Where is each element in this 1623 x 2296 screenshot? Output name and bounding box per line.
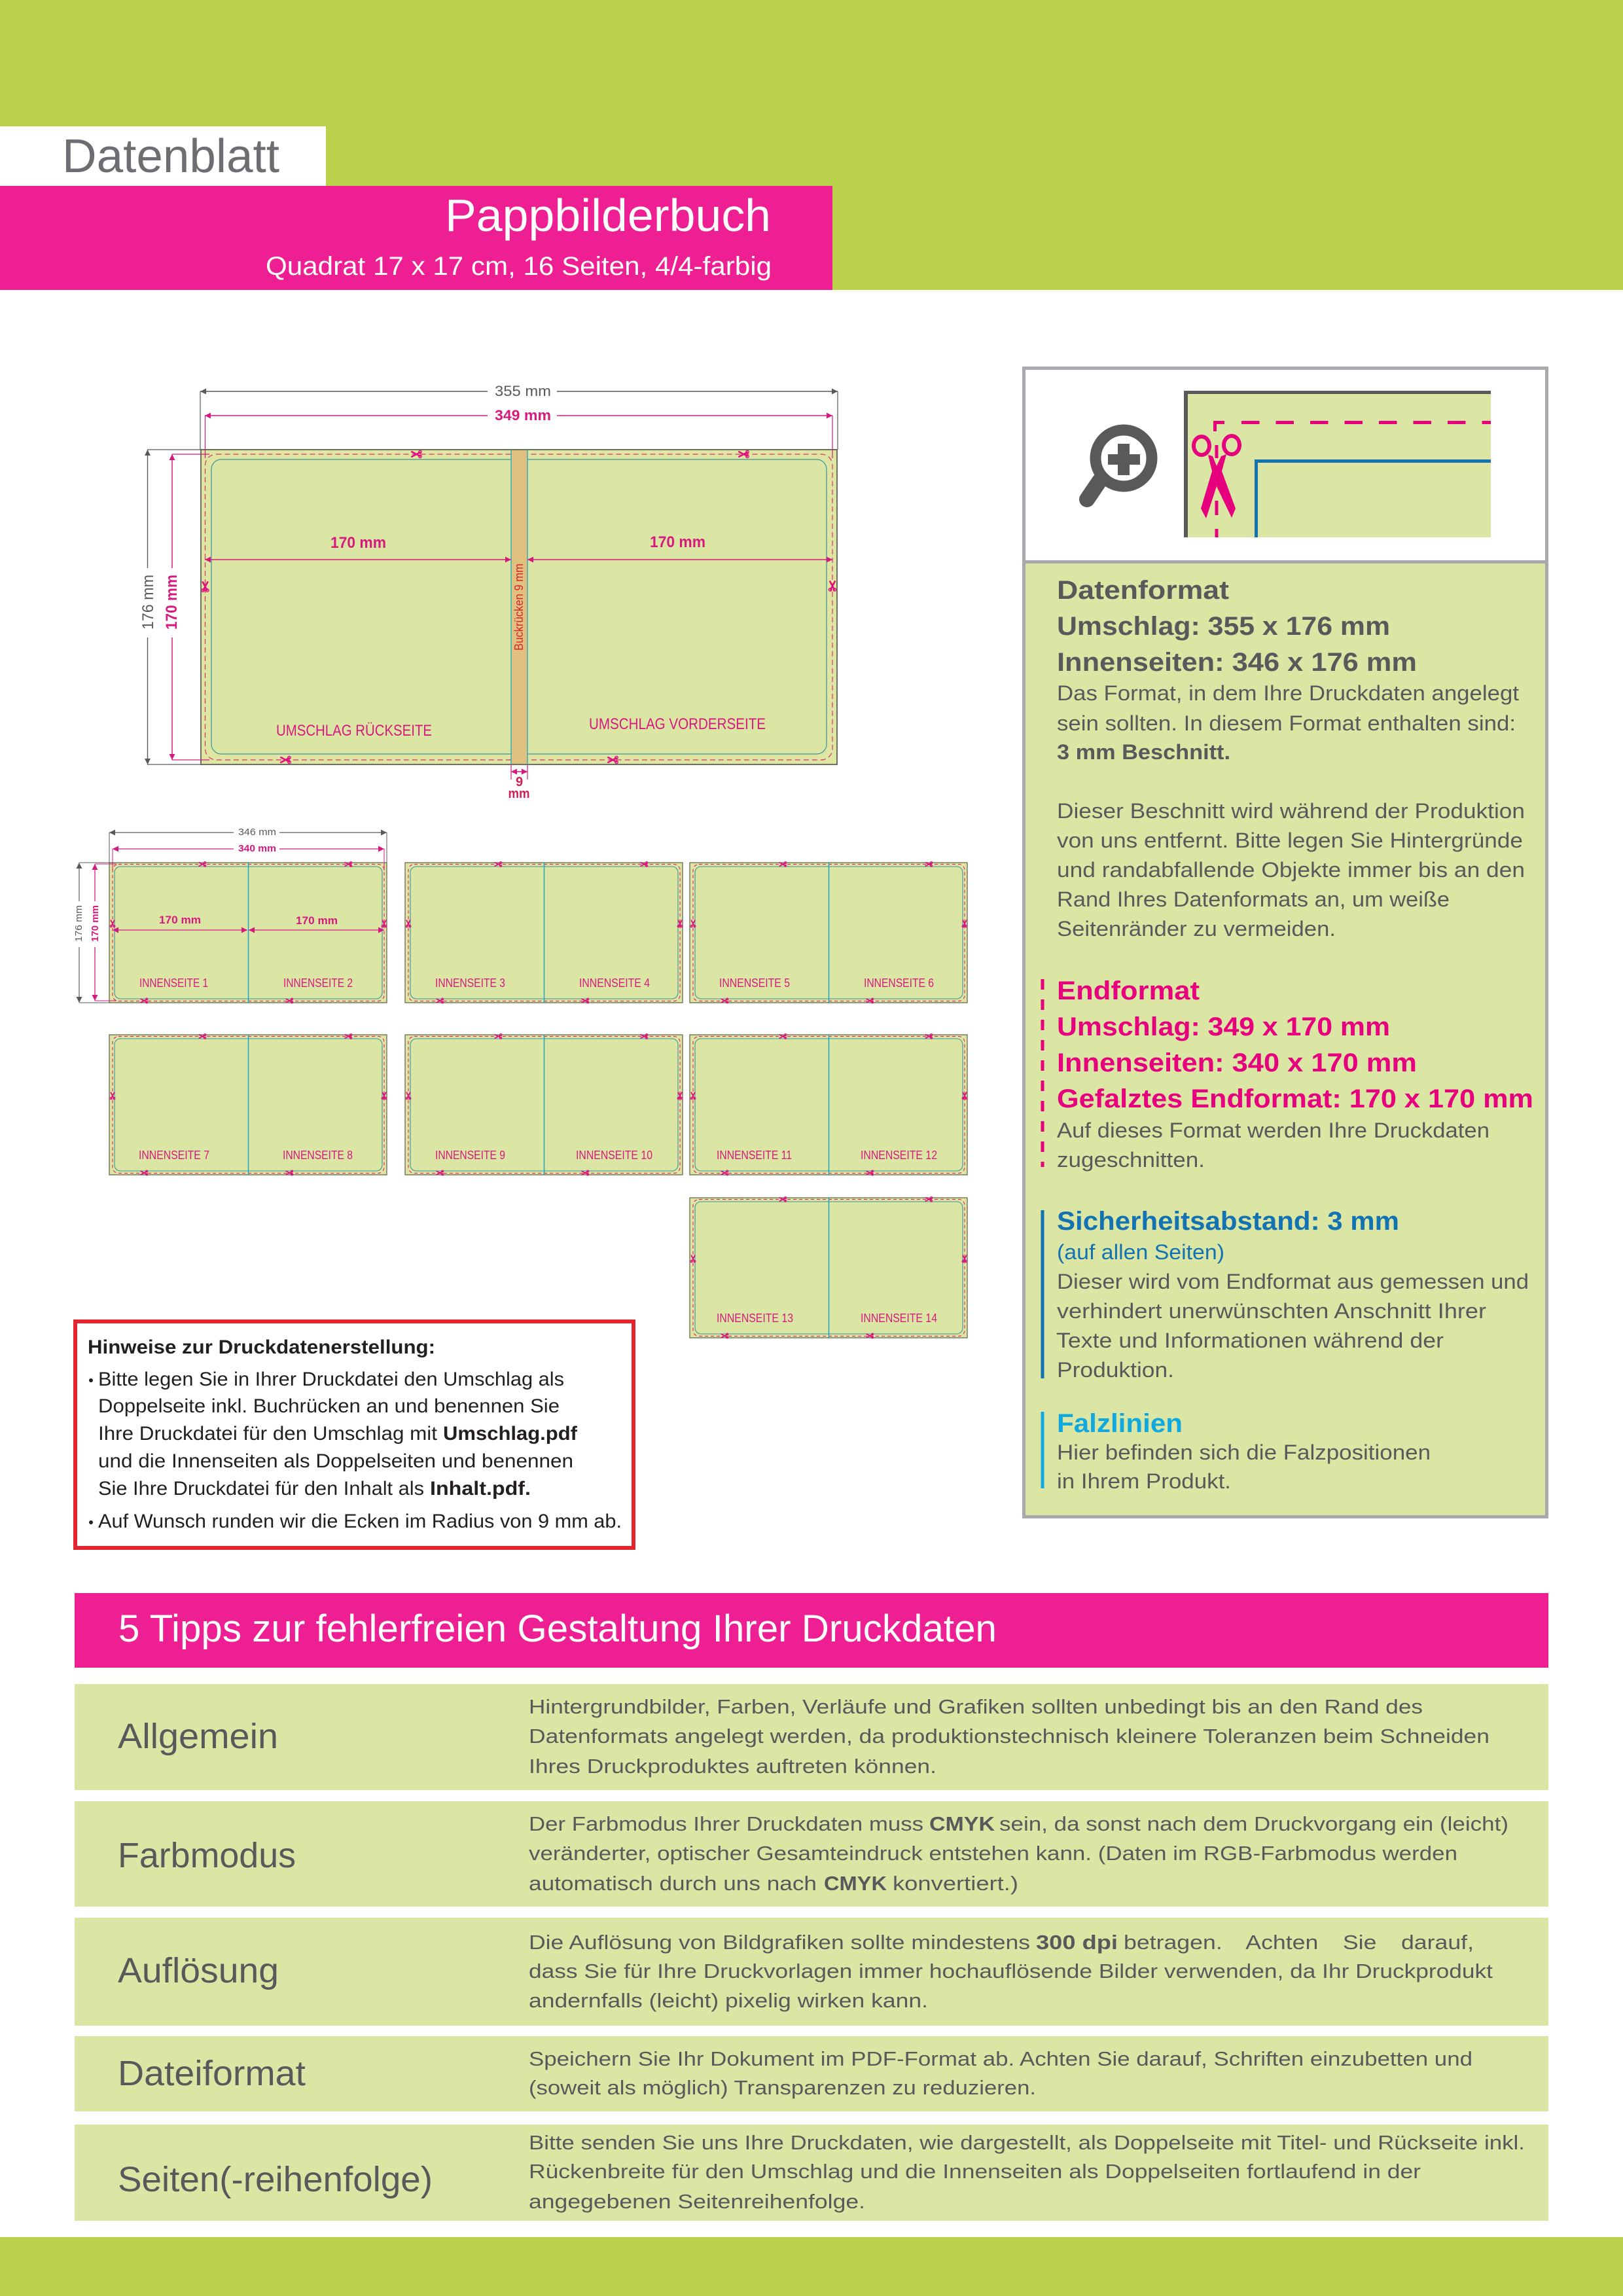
spine: Buckrücken 9 mm: [512, 564, 526, 651]
heading: 5 Tipps: [75, 1593, 1548, 1668]
text block: Sicherheitsabstand: (auf allen Seiten): [1057, 1240, 1224, 1264]
tip: Seiten(-reihenfolge): [75, 2125, 1548, 2221]
tip: Allgemein: Allgemein: [118, 1717, 278, 1756]
panel: Innenseite 13/14: INNENSEITE 14: [861, 1312, 937, 1325]
dimension 9 mm spine: 9: [516, 775, 523, 789]
text block: Endformat: zugeschnitten.: [1057, 1148, 1205, 1172]
bottom green band: [0, 2237, 1623, 2296]
text block: Endformat: Auf dieses Format werden Ihre Druckdaten: [1057, 1119, 1489, 1142]
panel: Innenseite 13/14: INNENSEITE 13: [717, 1312, 793, 1325]
panel: Innenseite 3/4: INNENSEITE 3: [435, 977, 505, 990]
dimension 170 mm small: 170 mm: [90, 905, 101, 942]
callout: Hinweise zur Druckdatenerstellung: Hinweise zur Druckdatenerstellung:: [88, 1336, 435, 1358]
callout: Hinweise zur Druckdatenerstellung: Ihre Druckdatei für den Umschlag mit: [98, 1423, 438, 1444]
callout: Hinweise zur Druckdatenerstellung: Sie Ihre Druckdatei für den Inhalt als: [98, 1478, 424, 1499]
label: Umschlag Vorderseite: UMSCHLAG VORDERSEITE: [589, 715, 766, 733]
top green banner: [0, 0, 1623, 290]
tip: Auflösung: andernfalls (leicht) pixelig wirken kann.: [529, 1989, 928, 2012]
text block: Datenformat: Das Format, in dem Ihre Druckdaten angelegt: [1057, 681, 1519, 705]
tip: Auflösung: betragen. Achten Sie darauf,: [1124, 1931, 1474, 1954]
panel: Innenseite 1/2: INNENSEITE 2: [283, 977, 353, 990]
callout: Hinweise zur Druckdatenerstellung: Inhalt.pdf.: [430, 1478, 531, 1499]
text block: Datenformat: Dieser Beschnitt wird während der Produktion: [1057, 799, 1525, 823]
text block: Sicherheitsabstand: Texte und Informationen während der: [1056, 1329, 1444, 1352]
panel: Innenseite 7/8: INNENSEITE 7: [139, 1149, 209, 1162]
callout: Hinweise zur Druckdatenerstellung: Bitte legen Sie in Ihrer Druckdatei den Umschlag als: [98, 1369, 564, 1390]
dimension 340 mm: 340 mm: [238, 843, 276, 854]
text block: Endformat: [1043, 977, 1533, 1172]
panel: Innenseite 9/10: INNENSEITE 10: [576, 1149, 652, 1162]
dimension 176 mm small: 176 mm: [73, 905, 84, 942]
callout: Hinweise zur Druckdatenerstellung: Umschlag.pdf: [443, 1423, 578, 1444]
dimension 9 mm spine: mm: [508, 787, 530, 801]
panel: Innenseite 11/12: INNENSEITE 11: [717, 1149, 792, 1162]
callout: Hinweise zur Druckdatenerstellung: Auf Wunsch runden wir die Ecken im Radius von 9 mm ab.: [98, 1511, 622, 1532]
tip: Allgemein: Datenformats angelegt werden, da produktionstechnisch kleinere Toleranzen beim Schneiden: [529, 1725, 1489, 1748]
panel: Innenseite 1/2: INNENSEITE 1: [139, 977, 208, 990]
tip: Seiten(-reihenfolge): Bitte senden Sie uns Ihre Druckdaten, wie dargestellt, als Doppelseite mit Titel- und Rückseite inkl.: [529, 2131, 1525, 2154]
tip: Seiten(-reihenfolge): Seiten(-reihenfolge): [118, 2160, 433, 2199]
text block: Endformat: Endformat: [1057, 977, 1200, 1005]
panel: format legend: [1022, 368, 1548, 1517]
callout: Hinweise zur Druckdatenerstellung: Doppelseite inkl. Buchrücken an und benennen Sie: [98, 1395, 560, 1417]
text block: Datenformat: Umschlag: 355 x 176 mm: [1057, 612, 1390, 641]
tip: Dateiformat: Speichern Sie Ihr Dokument im PDF-Format ab. Achten Sie darauf, Schriften einzubetten und: [529, 2047, 1472, 2070]
callout: Hinweise zur Druckdatenerstellung: und die Innenseiten als Doppelseiten und benennen: [98, 1450, 573, 1472]
callout: Hinweise zur Druckdatenerstellung: [75, 1321, 633, 1548]
panel: Innenseite 5/6: INNENSEITE 6: [864, 977, 934, 990]
dimension 355 mm: 355 mm: [495, 383, 551, 399]
panel: Innenseite 13/14: [690, 1197, 967, 1338]
text block: Sicherheitsabstand: [1041, 1207, 1529, 1382]
tip: Farbmodus: CMYK: [929, 1812, 995, 1835]
panel: Innenseite 9/10: INNENSEITE 9: [435, 1149, 505, 1162]
title banner: Pappbilderbuch: [445, 190, 771, 241]
panel: Innenseite 7/8: [109, 1034, 387, 1175]
panel: Innenseite 9/10: [405, 1034, 683, 1175]
title banner: Quadrat 17 x 17 cm, 16 Seiten, 4/4-farbig: [266, 252, 772, 281]
dimension 170 mm vertical: 170 mm: [163, 575, 181, 630]
panel: Innenseite 5/6: [690, 862, 967, 1003]
text block: Falzlinien: Hier befinden sich die Falzpositionen: [1057, 1441, 1431, 1464]
text block: Endformat: Gefalztes Endformat: 170 x 170 mm: [1057, 1085, 1533, 1113]
tip: Farbmodus: CMYK: [824, 1872, 887, 1895]
text block: Datenformat: Seitenränder zu vermeiden.: [1057, 917, 1336, 941]
panel: Innenseite 1/2: [109, 862, 387, 1003]
text block: Sicherheitsabstand: Dieser wird vom Endformat aus gemessen und: [1057, 1270, 1529, 1293]
dimension 346 mm: 346 mm: [238, 827, 276, 838]
text block: Falzlinien: in Ihrem Produkt.: [1057, 1469, 1231, 1493]
label: Datenblatt: Datenblatt: [62, 130, 279, 183]
text block: Sicherheitsabstand: Sicherheitsabstand: 3 mm: [1057, 1207, 1399, 1236]
tip: Allgemein: [75, 1684, 1548, 1790]
text block: Datenformat: von uns entfernt. Bitte legen Sie Hintergründe: [1057, 829, 1523, 852]
text block: Datenformat: und randabfallende Objekte immer bis an den: [1057, 858, 1525, 882]
dimension 170 mm right panel: 170 mm: [650, 533, 705, 551]
text block: Datenformat: Innenseiten: 346 x 176 mm: [1057, 648, 1417, 677]
heading: 5 Tipps: 5 Tipps zur fehlerfreien Gestaltung Ihrer Druckdaten: [118, 1607, 997, 1650]
tip: Auflösung: dass Sie für Ihre Druckvorlagen immer hochauflösende Bilder verwenden, da Ihr Druckprodukt: [529, 1960, 1493, 1982]
panel: Innenseite 11/12: [690, 1034, 967, 1175]
tip: Farbmodus: veränderter, optischer Gesamteindruck entstehen kann. (Daten im RGB-Farbmodus werden: [529, 1842, 1457, 1865]
dimension 176 mm vertical: 176 mm: [139, 575, 157, 630]
tip: Farbmodus: konvertiert.): [893, 1872, 1018, 1895]
text block: Sicherheitsabstand: verhindert unerwünschten Anschnitt Ihrer: [1057, 1299, 1486, 1323]
tip: Dateiformat: Dateiformat: [118, 2054, 306, 2093]
panel: Innenseite 3/4: INNENSEITE 4: [579, 977, 650, 990]
icon: crop corner with scissors: [1184, 391, 1491, 537]
tip: Seiten(-reihenfolge): Rückenbreite für den Umschlag und die Innenseiten als Doppelseiten fortlaufend in der: [529, 2160, 1421, 2183]
panel: Innenseite 5/6: INNENSEITE 5: [719, 977, 790, 990]
panel: Innenseite 3/4: [405, 862, 683, 1003]
text block: Datenformat: 3 mm Beschnitt.: [1057, 740, 1230, 764]
tip: Farbmodus: sein, da sonst nach dem Druckvorgang ein (leicht): [999, 1812, 1508, 1835]
text block: Falzlinien: [1041, 1409, 1431, 1493]
dimension 170 mm left panel: 170 mm: [330, 534, 386, 552]
tip: Auflösung: Die Auflösung von Bildgrafiken sollte mindestens: [529, 1931, 1030, 1954]
tip: Farbmodus: Der Farbmodus Ihrer Druckdaten muss: [529, 1812, 923, 1835]
text block: Endformat: Innenseiten: 340 x 170 mm: [1057, 1049, 1417, 1077]
title banner: [0, 186, 832, 290]
dimension 170 mm page 2: 170 mm: [296, 914, 338, 927]
scissors marks on cover: [202, 450, 836, 764]
tip: Dateiformat: [75, 2036, 1548, 2111]
dimension 349 mm: 349 mm: [495, 407, 551, 423]
tip: Dateiformat: (soweit als möglich) Transparenzen zu reduzieren.: [529, 2076, 1036, 2099]
text block: Datenformat: sein sollten. In diesem Format enthalten sind:: [1057, 711, 1516, 735]
text block: Datenformat: [1057, 576, 1525, 941]
tip: Farbmodus: automatisch durch uns nach: [529, 1872, 817, 1895]
dimension 170 mm page 1: 170 mm: [159, 914, 201, 926]
label: Datenblatt: [0, 126, 326, 187]
label: Umschlag Rückseite: UMSCHLAG RÜCKSEITE: [276, 722, 432, 740]
icon: magnifier: [1087, 430, 1152, 499]
text block: Datenformat: Rand Ihres Datenformats an, um weiße: [1057, 888, 1450, 911]
text block: Sicherheitsabstand: Produktion.: [1057, 1358, 1174, 1382]
inner spread 1-2 with dimensions: [73, 827, 387, 1003]
text block: Falzlinien: Falzlinien: [1057, 1409, 1183, 1438]
dimension 9 mm spine: [508, 764, 530, 801]
tip: Auflösung: 300 dpi: [1036, 1931, 1118, 1954]
tip: Auflösung: Auflösung: [118, 1951, 279, 1990]
tip: Auflösung: [75, 1918, 1548, 2026]
text block: Endformat: Umschlag: 349 x 170 mm: [1057, 1013, 1390, 1041]
tip: Allgemein: Ihres Druckproduktes auftreten können.: [529, 1755, 936, 1778]
tip: Farbmodus: Farbmodus: [118, 1836, 296, 1875]
tip: Allgemein: Hintergrundbilder, Farben, Verläufe und Grafiken sollten unbedingt bis an den Rand des: [529, 1695, 1423, 1718]
panel: Innenseite 11/12: INNENSEITE 12: [861, 1149, 937, 1162]
panel: Innenseite 7/8: INNENSEITE 8: [283, 1149, 353, 1162]
tip: Seiten(-reihenfolge): angegebenen Seitenreihenfolge.: [529, 2190, 865, 2213]
text block: Datenformat: Datenformat: [1057, 576, 1229, 605]
tip: Farbmodus: [75, 1801, 1548, 1907]
cover diagram: [139, 383, 838, 801]
spine: [511, 450, 527, 764]
cover sheet: [201, 450, 837, 764]
